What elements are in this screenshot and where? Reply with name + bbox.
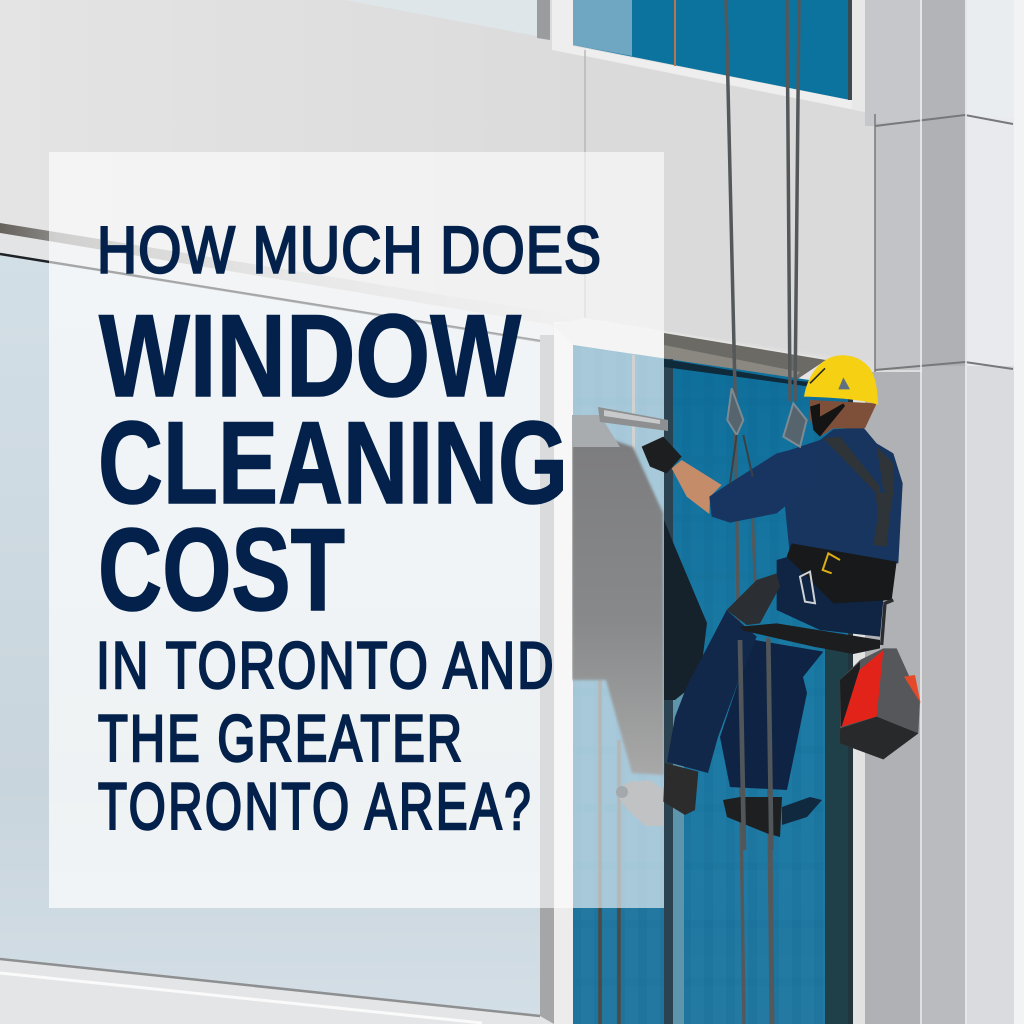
lower right mullion bbox=[853, 375, 866, 1024]
forearm bbox=[672, 460, 722, 514]
heading line: cleaning: CLEANING bbox=[98, 398, 568, 528]
top blue window bbox=[573, 0, 865, 112]
reflection beyond panel bbox=[664, 520, 707, 700]
right pillar columns bbox=[865, 0, 1024, 1024]
title text bbox=[96, 213, 601, 844]
sleeve bbox=[709, 443, 817, 523]
upper wall right panel bbox=[585, 56, 874, 362]
heading line: in toronto and: IN TORONTO AND bbox=[96, 629, 554, 703]
tool bag bbox=[840, 600, 921, 759]
left window frame bbox=[0, 233, 553, 345]
glove bbox=[642, 437, 682, 473]
left large window glass bbox=[0, 255, 540, 1016]
heading line: the greater: THE GREATER bbox=[98, 702, 462, 776]
right leg bbox=[720, 640, 823, 790]
heading line: window: WINDOW bbox=[99, 291, 521, 421]
neck and head bbox=[810, 400, 877, 437]
panel brightening over left glass bbox=[49, 263, 540, 908]
squeegee bbox=[598, 407, 668, 431]
torso bbox=[785, 427, 903, 563]
heading line: cost: COST bbox=[98, 505, 345, 635]
belt bbox=[787, 543, 897, 603]
top mullion bbox=[552, 0, 865, 112]
heading line: how much does: HOW MUCH DOES bbox=[97, 213, 601, 287]
hips bbox=[777, 553, 883, 637]
yellow buckle bbox=[823, 553, 840, 573]
reflected ropes bbox=[600, 680, 619, 1024]
centre mullion bbox=[554, 322, 573, 1024]
main blue window bbox=[573, 345, 854, 1024]
reflection of worker in glass bbox=[572, 415, 664, 826]
harness straps bbox=[823, 437, 893, 547]
face mask bbox=[810, 403, 845, 437]
left leg bbox=[667, 610, 757, 773]
ropes bbox=[726, 0, 799, 1024]
boots bbox=[663, 763, 822, 837]
carabiner bbox=[800, 572, 815, 603]
lower wall bbox=[0, 959, 554, 1024]
soffit shadow bbox=[664, 333, 826, 384]
rope over legs bbox=[740, 640, 771, 850]
panel seam bbox=[584, 50, 586, 318]
upper wall panels bbox=[0, 0, 874, 362]
worker bbox=[642, 355, 921, 850]
seat board bbox=[740, 623, 880, 654]
wall shadow band bbox=[0, 223, 585, 325]
translucent text panel bbox=[49, 152, 664, 908]
tool pouch bbox=[727, 573, 780, 625]
heading line: toronto area: TORONTO AREA? bbox=[98, 770, 531, 844]
helmet bbox=[804, 355, 878, 405]
rope knots bbox=[727, 388, 807, 483]
top left window bbox=[345, 0, 550, 40]
